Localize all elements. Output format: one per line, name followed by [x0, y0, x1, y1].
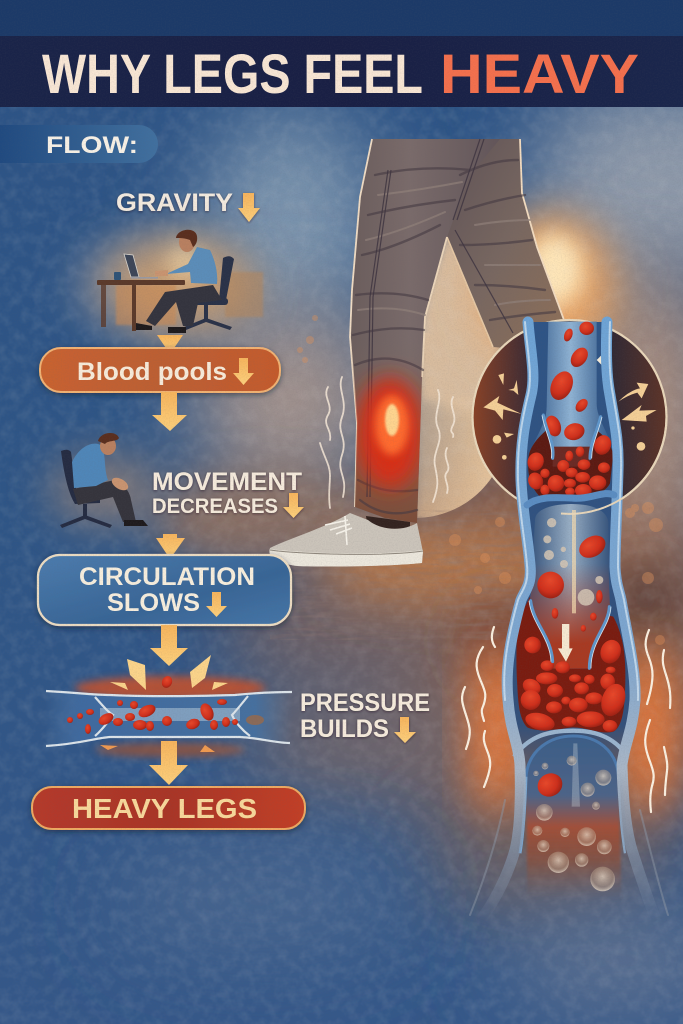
- ankle: [366, 516, 410, 532]
- arrow: [152, 392, 187, 431]
- laptop: [114, 254, 158, 280]
- pants folds: [353, 160, 555, 513]
- desk: [97, 280, 185, 331]
- arrow: [149, 741, 188, 785]
- step: blood pools: Blood pools: [77, 358, 227, 386]
- front leg: [350, 139, 500, 523]
- vein outer walls: [470, 322, 668, 917]
- step: pressure builds: [300, 689, 430, 743]
- step: pressure builds: BUILDS: [300, 715, 389, 743]
- step: circulation slows: CIRCULATION: [79, 563, 255, 591]
- upper vein segment: [525, 322, 614, 498]
- pants seams: [367, 139, 513, 497]
- sneaker: [269, 513, 423, 567]
- vessel body: [45, 692, 292, 745]
- middle vein segment: [516, 504, 630, 734]
- bokeh dots: [297, 315, 665, 645]
- header band: [0, 0, 683, 107]
- illustration: pressure in narrowed vessel: [45, 655, 292, 757]
- illustration: man working at desk: [97, 230, 263, 333]
- man: [136, 230, 222, 333]
- connector triangle: [157, 335, 183, 354]
- step: circulation slows: SLOWS: [107, 589, 200, 617]
- step: movement decreases: [152, 468, 304, 518]
- step: movement decreases: MOVEMENT: [152, 468, 302, 496]
- nerve squiggles near leg: [320, 377, 454, 508]
- lower vein segment: [514, 731, 627, 900]
- vein magnified circle inset: [472, 320, 666, 514]
- step: pressure builds: PRESSURE: [300, 689, 430, 717]
- title: HEAVY: [440, 42, 639, 105]
- rear leg: [447, 139, 564, 350]
- knee inflammation glow: [356, 377, 424, 489]
- pressure bolts: [483, 373, 657, 460]
- downward flow arrow: [558, 624, 573, 662]
- arrow: [150, 625, 188, 666]
- leg illustration: [269, 139, 564, 567]
- flow label pill: [0, 125, 158, 163]
- connector arrow: [156, 534, 185, 559]
- pressure arrows: [100, 655, 228, 752]
- step: movement decreases: DECREASES: [152, 495, 278, 518]
- step: circulation slows: [38, 555, 291, 625]
- warm disc behind legs: [417, 332, 492, 518]
- flow label pill: FLOW:: [46, 132, 138, 159]
- title: WHY LEGS FEEL: [42, 42, 423, 105]
- nerve squiggles near vein: [462, 627, 670, 812]
- vein cross-section: [470, 322, 668, 917]
- step: gravity label: [116, 189, 260, 222]
- step: gravity label: GRAVITY: [116, 189, 233, 217]
- red cells: [67, 674, 238, 734]
- circle rim overlapping vein: [561, 417, 666, 514]
- step: heavy legs: [32, 787, 305, 829]
- vein base fill: [507, 322, 635, 860]
- chair: [184, 256, 234, 330]
- lower pant warm tint: [352, 350, 423, 523]
- step: heavy legs: HEAVY LEGS: [72, 793, 257, 824]
- illustration: man slumped in chair: [50, 433, 160, 528]
- step: blood pools: [40, 348, 280, 392]
